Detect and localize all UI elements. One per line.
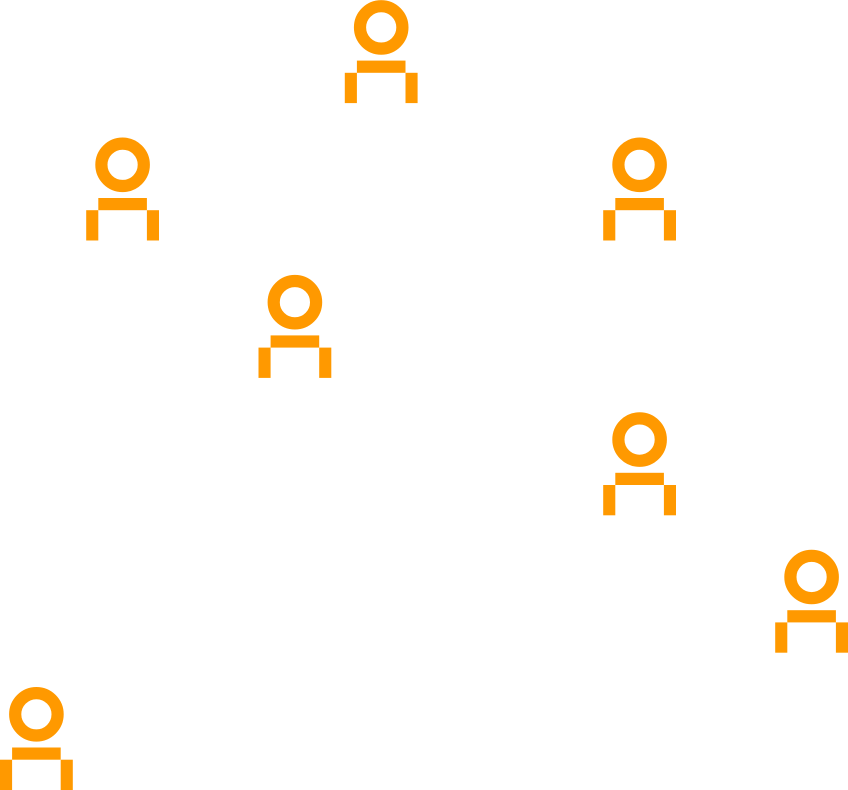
- icon: person 6: [775, 556, 848, 653]
- icon: person 1: [345, 6, 418, 103]
- icon: person 2: [86, 144, 159, 240]
- icon: person 3: [603, 144, 676, 240]
- icon: person 4: [258, 281, 331, 378]
- icon: person 5: [603, 418, 676, 515]
- icon: person 7: [0, 693, 73, 790]
